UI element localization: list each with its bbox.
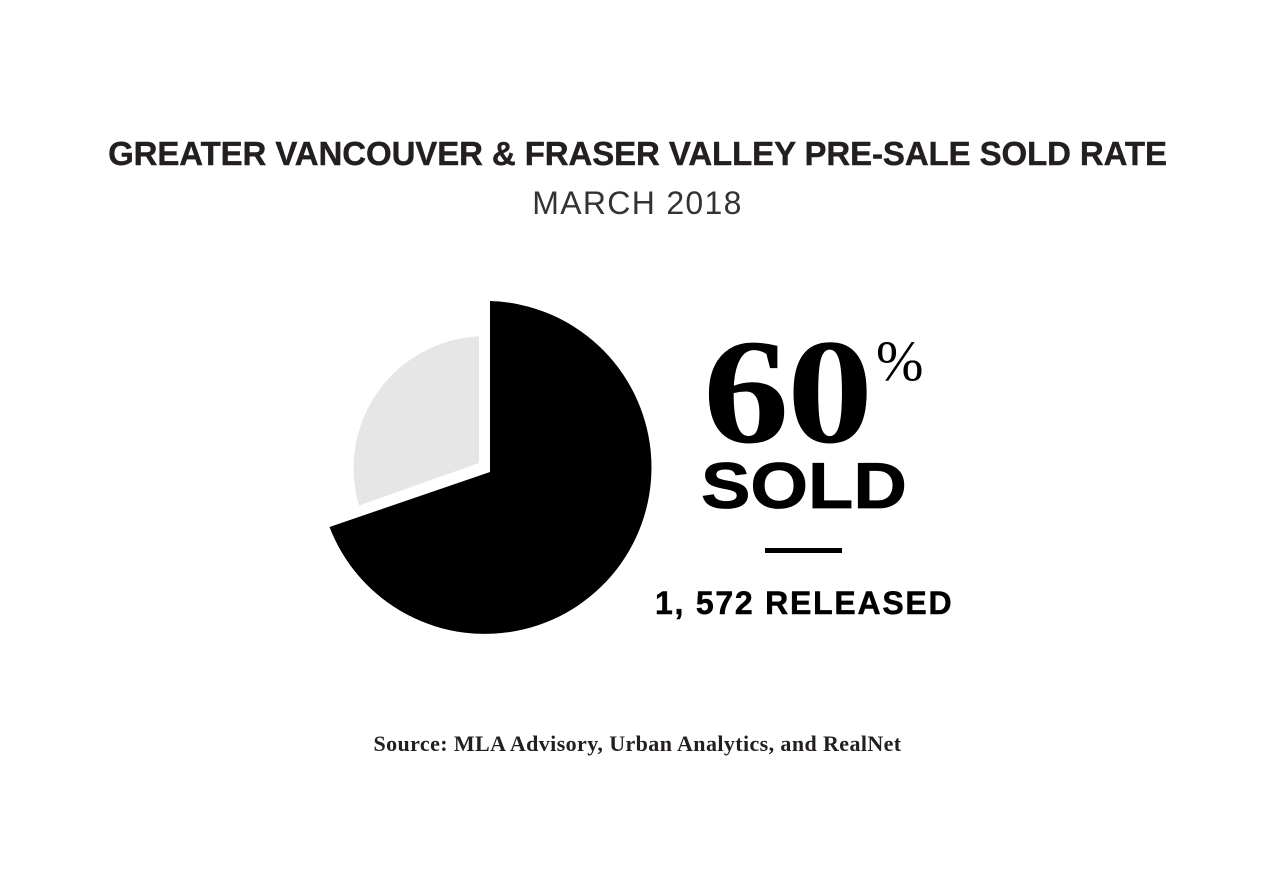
title: GREATER VANCOUVER & FRASER VALLEY PRE-SALE SOLD RATE: [108, 135, 1167, 172]
divider bar: [765, 548, 842, 553]
sold label: SOLD: [701, 449, 907, 522]
percent sign: %: [876, 330, 923, 393]
source note: Source: MLA Advisory, Urban Analytics, and RealNet: [373, 731, 902, 756]
big percentage: 60: [703, 309, 871, 475]
released count: 1, 572 RELEASED: [655, 585, 953, 621]
pie slice: sold: [330, 301, 651, 634]
subtitle: MARCH 2018: [532, 185, 743, 221]
pie slice: unsold: [354, 336, 479, 506]
